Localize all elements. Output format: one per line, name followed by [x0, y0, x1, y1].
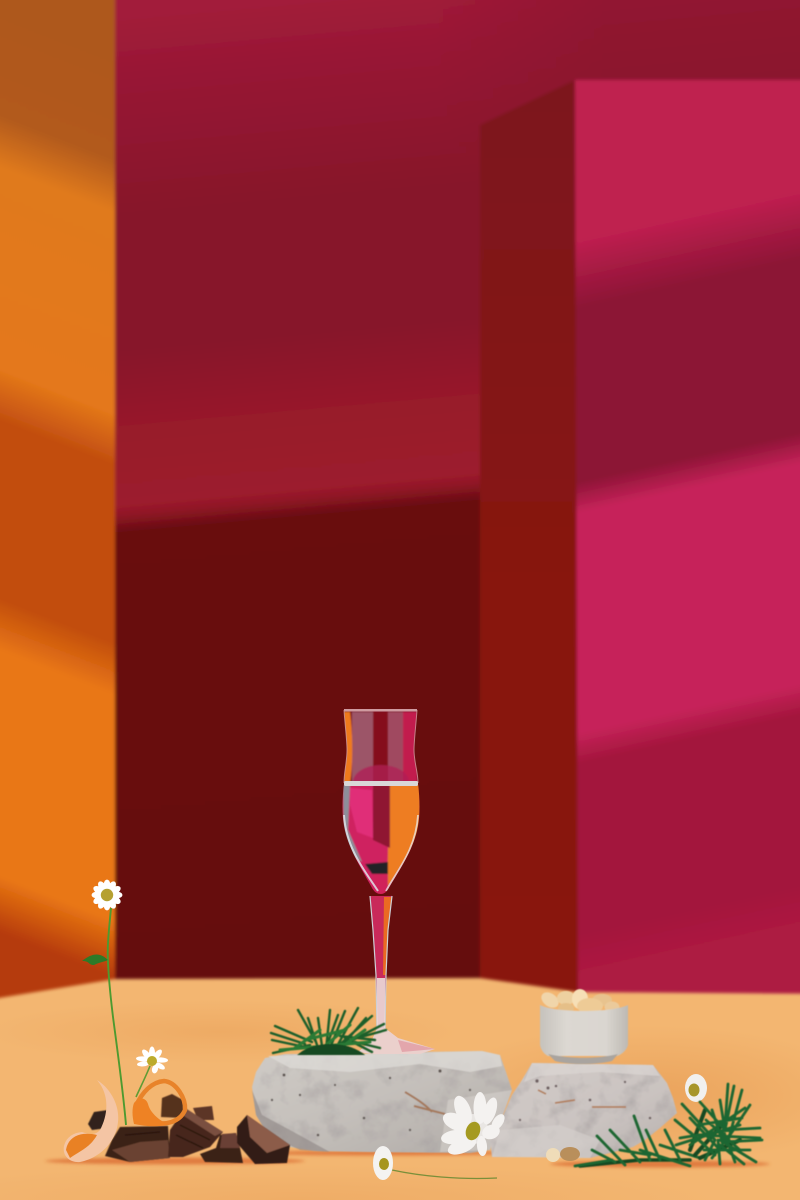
small daisy behind right rosemary: [685, 1074, 707, 1102]
liquid surface line: [344, 781, 418, 786]
orange peel curl left: [64, 1080, 118, 1162]
panel: pillar pink front: [575, 80, 800, 1010]
panel: pillar shaded side: [480, 80, 578, 1010]
foot: [358, 1028, 435, 1054]
glass: [340, 705, 435, 1054]
stem: [370, 896, 392, 1030]
orange peel curl right: [132, 1081, 185, 1126]
bowl of nuts: [538, 989, 628, 1064]
large white daisy at rocks: [440, 1092, 507, 1158]
small daisy: [136, 1046, 168, 1097]
liquid and reflections: [342, 712, 420, 894]
stone: right rock: [490, 1063, 677, 1158]
tall daisy with stem and leaf: [82, 880, 126, 1125]
stone: large left rock: [252, 1051, 512, 1153]
nuts: [538, 989, 620, 1014]
rosemary sprig on rock: [271, 1008, 386, 1054]
glass outline: [344, 710, 418, 783]
daisy lying on floor near rock: [373, 1146, 497, 1180]
loose nuts on floor: [546, 1147, 580, 1162]
panel: peach floor: [0, 978, 800, 1200]
shadow: objects on floor: [45, 1150, 770, 1168]
panel: left orange wall: [0, 0, 115, 1010]
tall daisy head: [92, 880, 122, 910]
bark pieces: [88, 1094, 290, 1164]
rosemary sprig right: [575, 1084, 762, 1166]
